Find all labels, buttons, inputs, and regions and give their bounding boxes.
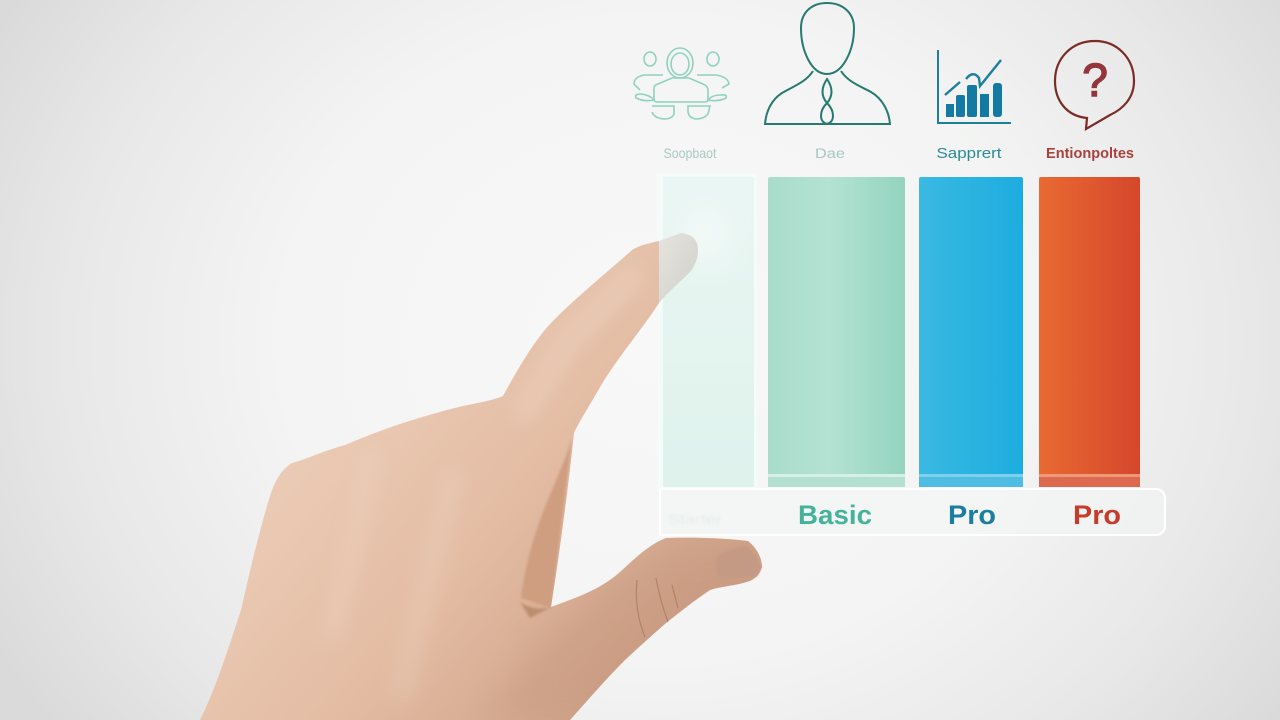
panel: plan comparison bars xyxy=(657,174,1140,490)
thumb creases xyxy=(636,578,678,637)
icon: question speech bubble xyxy=(1055,41,1134,129)
icon: team around table xyxy=(634,48,729,119)
icon: person with tie xyxy=(765,3,890,124)
hand silhouette xyxy=(200,241,762,720)
label: third plan heading: Sapprert xyxy=(936,145,1002,162)
label: fourth plan heading: Entionpoltes xyxy=(1046,145,1134,162)
highlight on index finger xyxy=(525,278,634,412)
shadow on thumb xyxy=(514,566,752,712)
hand shading xyxy=(403,278,752,712)
bar: pro plan red xyxy=(1039,177,1140,487)
thumbnail xyxy=(716,546,761,577)
bar: ghost plan xyxy=(657,174,757,490)
bar: pro plan blue xyxy=(919,177,1023,487)
icon: question speech bubble: ? xyxy=(1082,54,1108,106)
label: first plan heading: Soopbaot xyxy=(664,145,717,161)
label: second plan heading: Dae xyxy=(815,145,845,161)
fingertip behind glass xyxy=(659,233,698,303)
label: Pro blue: Pro xyxy=(948,500,996,530)
panel: plan name strip xyxy=(660,489,1165,535)
icon: rising bar chart xyxy=(938,50,1011,123)
label: faded plan name: Starter xyxy=(668,511,722,527)
middle finger behind xyxy=(521,438,572,608)
chart bars xyxy=(946,83,1002,117)
webbing crease xyxy=(520,602,548,618)
label: Basic: Basic xyxy=(798,500,872,530)
illustration: pointing hand xyxy=(200,233,770,720)
highlights on knuckles xyxy=(403,644,414,684)
label: Pro red: Pro xyxy=(1073,500,1121,530)
chart trend arrows xyxy=(945,60,1001,95)
bar: basic plan xyxy=(768,177,905,487)
